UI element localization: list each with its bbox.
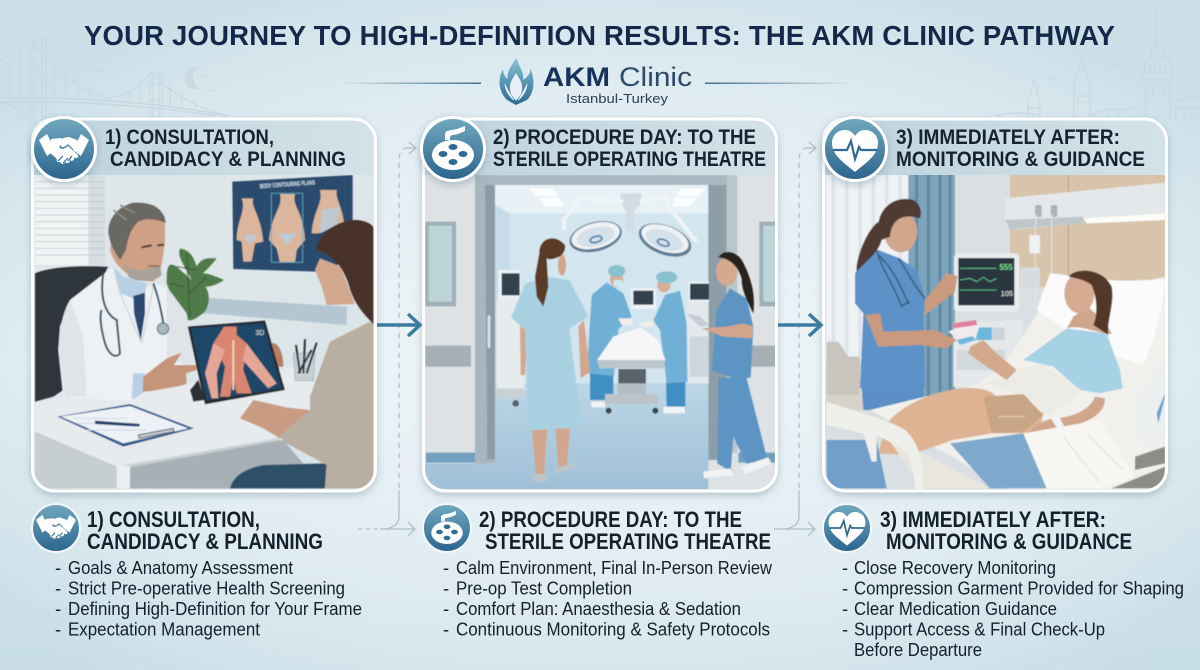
arrow: step 2 to step 3 — [778, 314, 821, 336]
dashed connector 2 — [774, 142, 816, 536]
text block: step 3 details: - — [842, 618, 848, 640]
photo: recovery room monitoring: 105 — [1001, 289, 1013, 298]
text block: step 1 details: 1) CONSULTATION, — [87, 507, 260, 532]
icon: surgical lamp badge large — [422, 118, 484, 180]
heading: card 2 header: STERILE OPERATING THEATRE — [493, 148, 766, 171]
logo: AKM Clinic: AKM — [543, 62, 610, 92]
text block: step 2 details: Pre-op Test Completion — [456, 578, 632, 598]
text block: step 1 details: - — [55, 578, 61, 598]
arrow: step 1 to step 2 — [377, 314, 420, 336]
photo: recovery room monitoring: 555 — [999, 263, 1013, 272]
text block: step 2 details: STERILE OPERATING THEATRE — [485, 529, 771, 554]
icon: handshake badge large — [32, 118, 96, 180]
text block: step 1 details: - — [55, 598, 61, 619]
icon: surgical lamp badge small — [423, 504, 471, 552]
icon: heart monitor badge large — [824, 118, 886, 180]
text block: step 1 details — [55, 507, 362, 640]
text block: step 2 details: - — [443, 578, 449, 598]
text block: step 3 details: - — [842, 578, 848, 598]
text block: step 2 details: Comfort Plan: Anaesthesia & Sedation — [456, 598, 741, 619]
text block: step 1 details: Expectation Management — [68, 618, 260, 640]
title: YOUR JOURNEY TO HIGH-DEFINITION RESULTS: THE AKM CLINIC PATHWAY — [84, 20, 1115, 51]
text block: step 3 details: Before Departure — [854, 639, 982, 660]
photo: sterile operating theatre — [425, 175, 777, 490]
skyline: Galata and mosques — [996, 8, 1200, 120]
text block: step 2 details: Calm Environment, Final In-Person Review — [456, 557, 773, 578]
icon: handshake badge small — [32, 504, 80, 552]
photo: doctor consultation: 3D — [255, 330, 264, 337]
panel: step 2 card — [424, 119, 777, 491]
text block: step 3 details: MONITORING & GUIDANCE — [886, 529, 1132, 554]
panel: step 3 card — [824, 119, 1167, 491]
heading: card 3 header: MONITORING & GUIDANCE — [896, 148, 1145, 171]
text block: step 2 details: - — [443, 557, 449, 578]
skyline: Istanbul bridge — [0, 35, 228, 125]
text block: step 2 details — [443, 507, 773, 640]
logo: AKM Clinic: Clinic — [619, 62, 692, 92]
heading: card 2 header: 2) PROCEDURE DAY: TO THE — [493, 126, 756, 149]
panel: step 1 card — [32, 119, 376, 491]
heading: card 1 header: 1) CONSULTATION, — [105, 126, 274, 149]
text block: step 2 details: Continuous Monitoring & Safety Protocols — [456, 618, 770, 640]
text block: step 2 details: - — [443, 598, 449, 619]
text block: step 2 details: 2) PROCEDURE DAY: TO THE — [479, 507, 742, 532]
text block: step 3 details: - — [842, 557, 848, 578]
text block: step 2 details: - — [443, 618, 449, 640]
text block: step 1 details: CANDIDACY & PLANNING — [87, 529, 323, 554]
heading: card 3 header: 3) IMMEDIATELY AFTER: — [896, 126, 1120, 149]
photo: recovery room monitoring — [825, 174, 1167, 490]
text block: step 1 details: Defining High-Definition for Your Frame — [68, 598, 362, 619]
photo: doctor consultation: BODY CONTOURING PLANS — [260, 179, 315, 190]
logo: AKM Clinic — [340, 58, 853, 106]
text block: step 3 details: 3) IMMEDIATELY AFTER: — [880, 507, 1106, 532]
text block: step 3 details: - — [842, 598, 848, 619]
text block: step 3 details — [842, 507, 1184, 660]
dashed connector 1 — [358, 142, 416, 536]
text block: step 3 details: Close Recovery Monitoring — [854, 557, 1056, 578]
text block: step 1 details: Goals & Anatomy Assessment — [68, 557, 293, 578]
text block: step 3 details: Clear Medication Guidance — [854, 598, 1057, 619]
photo: doctor consultation — [34, 175, 374, 489]
logo: AKM Clinic: Istanbul-Turkey — [566, 91, 669, 106]
heading: card 1 header: CANDIDACY & PLANNING — [110, 148, 346, 171]
text block: step 1 details: - — [55, 618, 61, 640]
text block: step 1 details: - — [55, 557, 61, 578]
text block: step 3 details: Support Access & Final Check-Up — [854, 618, 1105, 640]
text block: step 1 details: Strict Pre-operative Health Screening — [68, 578, 345, 598]
icon: heart monitor badge small — [823, 504, 871, 552]
